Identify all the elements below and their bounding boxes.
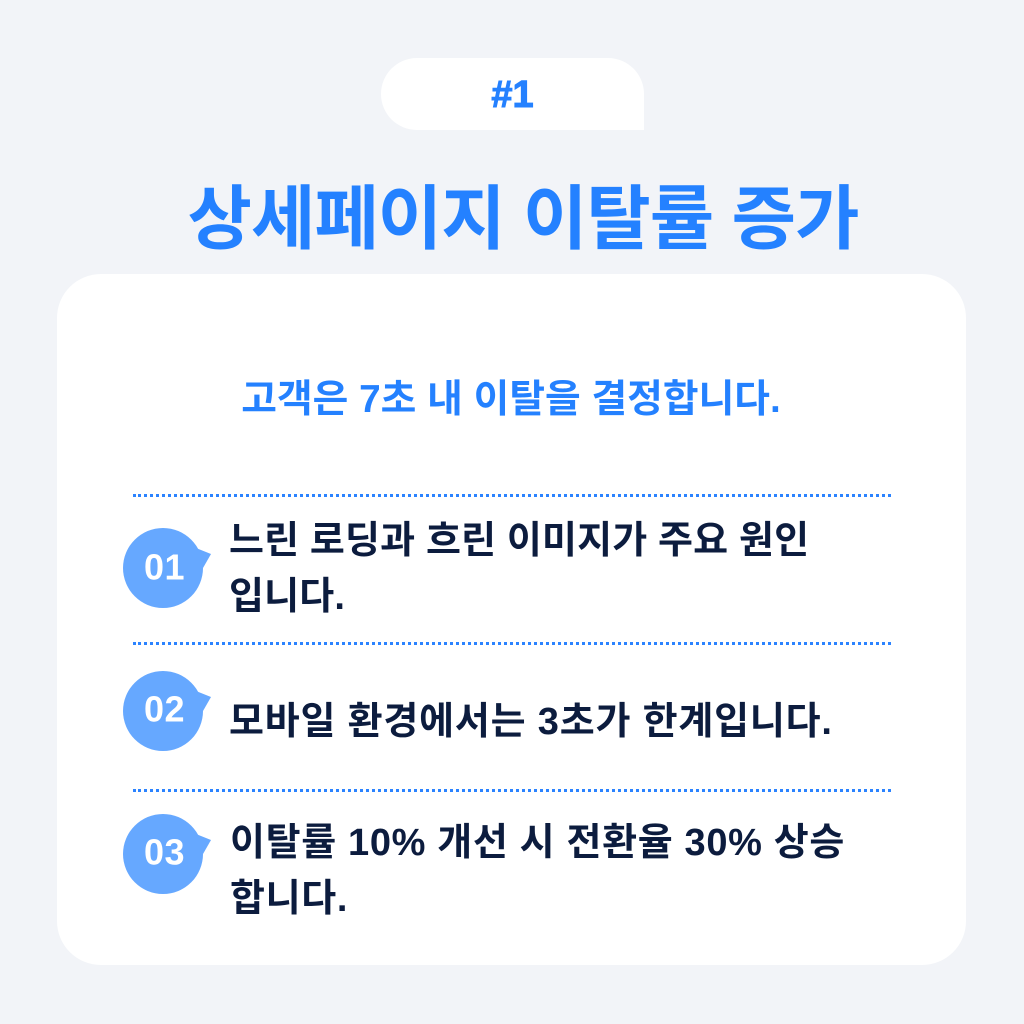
icon: badge 02 (123, 671, 211, 751)
text: item 03: 이탈률 10% 개선 시 전환율 30% 상승 (230, 822, 845, 864)
text: item 01: 입니다. (229, 576, 345, 618)
title: 상세페이지 이탈률 증가 (188, 180, 858, 258)
text: item 03 (230, 822, 845, 920)
text: item 02: 모바일 환경에서는 3초가 한계입니다. (229, 701, 833, 743)
tag: #1 (381, 58, 644, 130)
text: item 01 (229, 520, 809, 618)
text: item 03: 합니다. (230, 878, 348, 920)
icon: badge 03: 03 (144, 832, 185, 872)
tag: #1: #1 (491, 74, 534, 116)
icon: badge 03 (123, 814, 211, 894)
panel: content card (57, 274, 966, 965)
icon: badge 01 (123, 528, 211, 608)
text: item 01: 느린 로딩과 흐린 이미지가 주요 원인 (229, 520, 809, 562)
icon: badge 01: 01 (144, 546, 185, 588)
icon: badge 02: 02 (144, 688, 185, 730)
subtitle: 고객은 7초 내 이탈을 결정합니다. (241, 378, 781, 421)
